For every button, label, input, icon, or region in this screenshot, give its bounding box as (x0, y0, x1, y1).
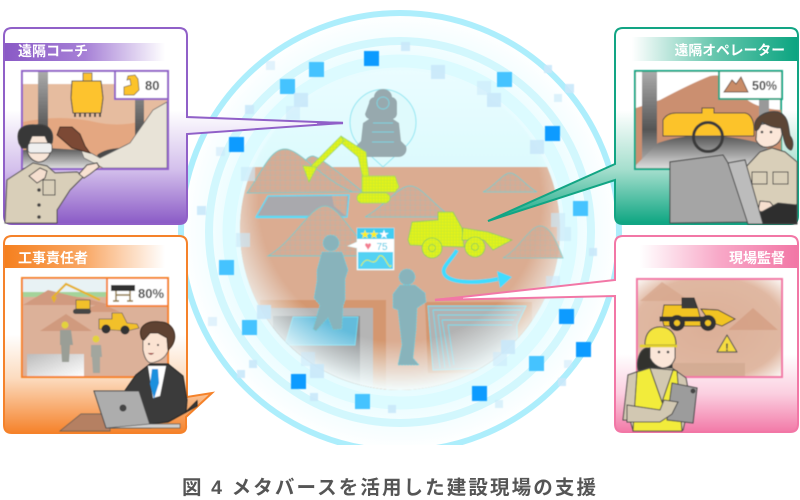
header: remote operator: 遠隔オペレーター (675, 42, 785, 58)
coach figure with VR goggles (5, 125, 99, 223)
header: site manager: 工事責任者 (18, 250, 88, 266)
header: remote operator (632, 37, 797, 61)
panel: remote operator (488, 28, 798, 224)
rating stars: ★ (360, 230, 370, 241)
floating data squares (197, 42, 597, 413)
AI robot avatar bubble (350, 89, 416, 167)
manager figure with laptop (60, 322, 197, 431)
panel: site manager (4, 236, 212, 433)
yellow wheel loader (660, 298, 735, 330)
screen: loader alert view (637, 279, 782, 377)
screen: loader cab view (635, 71, 782, 169)
data card speech bubble (348, 228, 394, 270)
stat badge: power 80 (115, 71, 168, 99)
header: site supervisor: 現場監督 (729, 250, 785, 266)
data card speech bubble: ★ (369, 230, 379, 241)
screen: excavator operator view (22, 71, 168, 169)
header: remote coach: 遠隔コーチ (18, 43, 88, 59)
figure caption: 図 4 メタバースを活用した建設現場の支援 (182, 477, 596, 499)
supervisor figure with helmet and tablet (623, 327, 697, 431)
data card speech bubble: ★ (379, 230, 389, 241)
worker silhouette left (313, 235, 348, 331)
header: site manager (5, 245, 165, 268)
stat badge: progress 80% (107, 278, 168, 306)
warning triangle (717, 335, 737, 354)
header: remote coach (5, 43, 165, 61)
wireframe mounds (247, 149, 563, 258)
stat badge: progress 80%: 80% (138, 286, 164, 301)
stat badge: power 80: 80 (145, 78, 159, 93)
wireframe wheel loader (408, 212, 512, 258)
heart score: ♥ (364, 239, 372, 253)
operator figure in seat (670, 112, 797, 224)
stat badge: earth moved 50%: 50% (752, 79, 777, 93)
header: site supervisor (640, 245, 797, 268)
warning triangle: ! (725, 342, 729, 354)
concentric rings background (181, 13, 619, 451)
data card speech bubble: 75 (376, 242, 388, 253)
panel: remote coach (4, 28, 343, 224)
panel: site supervisor (435, 236, 798, 432)
worker silhouette right (393, 269, 426, 365)
sky and ground disc (240, 135, 560, 390)
metaverse construction site scene (197, 42, 597, 413)
cyan movement arrow (444, 250, 512, 288)
stat badge: earth moved 50% (719, 71, 782, 99)
wireframe excavator (303, 136, 399, 203)
screen: overhead site view (22, 278, 168, 377)
wireframe pit upper left (256, 195, 378, 256)
